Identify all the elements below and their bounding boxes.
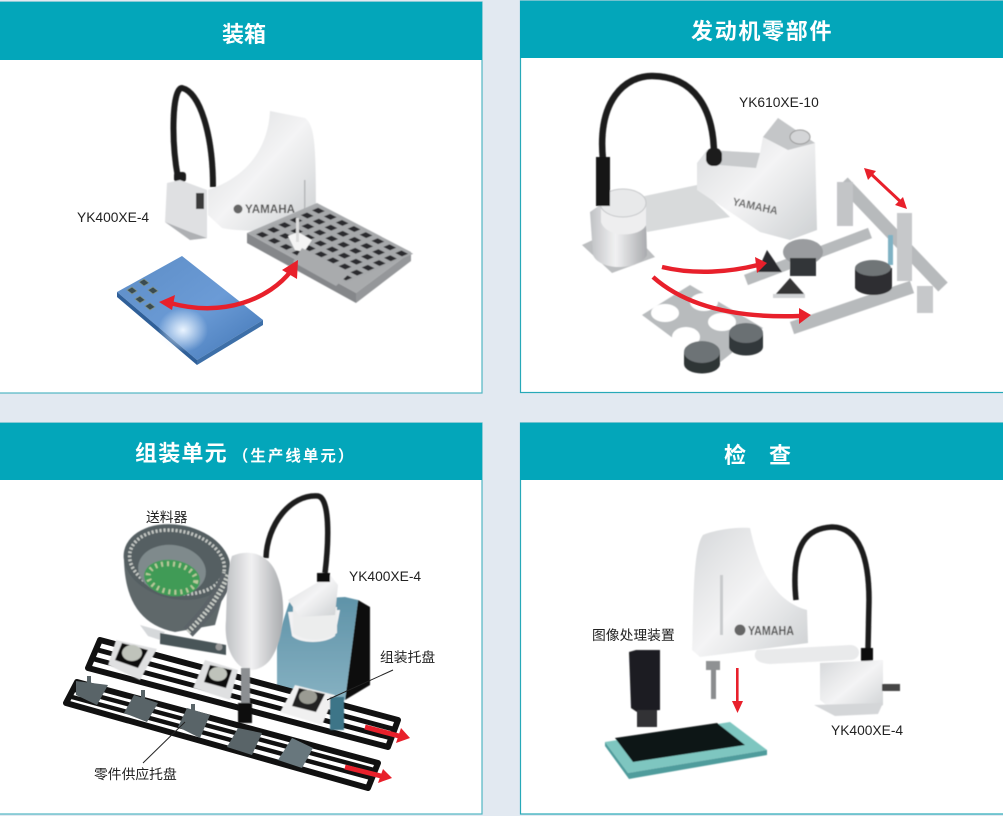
work plate with chips xyxy=(117,256,263,365)
panel: packing xyxy=(0,2,482,393)
arrows: transfer xyxy=(653,168,907,324)
parts plate xyxy=(642,285,763,374)
robot: YK400XE-4 inspection xyxy=(692,527,900,716)
robot: YK610XE-10 xyxy=(582,76,817,273)
robot: YK400XE-4 packing xyxy=(165,88,316,240)
heading: assembly cell: 组装单元 （生产线单元） xyxy=(135,441,355,466)
robot: YK400XE-4 packing: YAMAHA xyxy=(245,202,295,216)
heading: packing xyxy=(0,2,482,60)
label: parts pallet: 零件供应托盘 xyxy=(94,766,177,782)
conveyors xyxy=(66,640,398,788)
fixture with parts xyxy=(746,182,943,328)
lower pallets xyxy=(76,676,313,768)
heading: engine parts xyxy=(520,1,1003,58)
heading: assembly cell xyxy=(0,423,482,480)
robot: YK400XE-4 inspection: YAMAHA xyxy=(748,623,795,638)
panel: engine parts xyxy=(520,1,1003,392)
panel: inspection xyxy=(520,423,1003,814)
heading: packing: 装箱 xyxy=(222,22,266,47)
label: model: YK400XE-4 xyxy=(349,569,421,584)
tray with parts xyxy=(247,203,413,303)
arrow: down xyxy=(732,668,743,713)
label: model: YK400XE-4 xyxy=(831,723,903,738)
label: assembly pallet: 组装托盘 xyxy=(380,649,435,665)
bowl feeder xyxy=(116,515,238,655)
base box and arm xyxy=(266,496,370,700)
robot: YK610XE-10: YAMAHA xyxy=(731,196,779,218)
panel: assembly cell xyxy=(0,423,482,814)
camera xyxy=(629,650,660,727)
workpiece plate xyxy=(605,722,767,779)
arrows: conveyor direction xyxy=(345,727,410,783)
leader lines xyxy=(143,670,393,763)
label: model: YK610XE-10 xyxy=(739,95,819,110)
label: feeder: 送料器 xyxy=(146,510,188,525)
upper pallets xyxy=(108,640,344,730)
heading: inspection xyxy=(520,423,1003,480)
heading: engine parts: 发动机零部件 xyxy=(691,19,833,44)
heading: inspection: 检 查 xyxy=(724,443,791,468)
robot: YK400XE-4 assembly xyxy=(226,553,283,723)
arrow: pick and place xyxy=(159,260,298,310)
label: vision device: 图像处理装置 xyxy=(592,628,675,643)
label: model: YK400XE-4 xyxy=(77,210,149,225)
